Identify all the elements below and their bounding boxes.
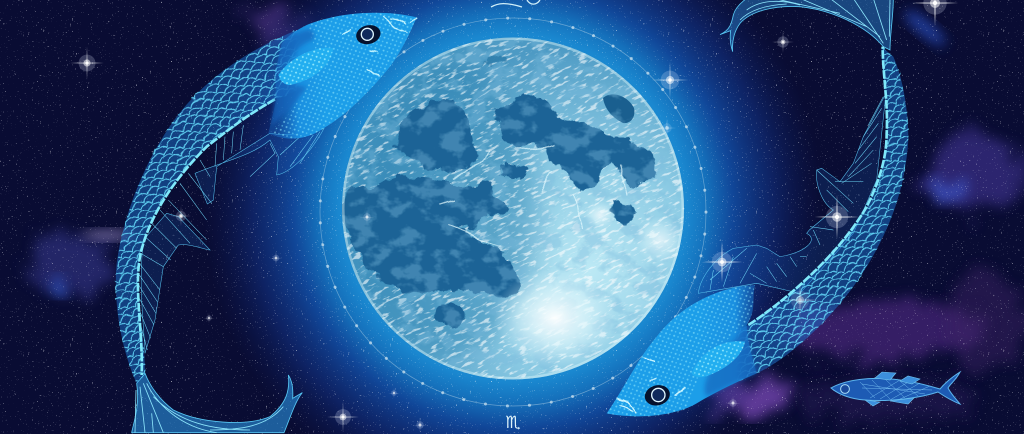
left fish spine xyxy=(138,99,275,375)
small fish eye xyxy=(841,385,849,393)
moon base disc xyxy=(342,38,684,380)
left fish tail xyxy=(132,373,302,433)
fish: upper left xyxy=(116,13,417,433)
right fish head speckle xyxy=(607,285,755,417)
right fish tail xyxy=(720,0,893,52)
left fish mouth markings xyxy=(342,15,417,77)
right fish pectoral speckle xyxy=(692,341,745,377)
left fish head speckle xyxy=(268,13,417,139)
left fish dark shoulder xyxy=(272,30,314,127)
fish: lower right xyxy=(607,0,908,417)
moon surface texture and maria xyxy=(287,0,739,431)
small fish scales xyxy=(860,379,932,400)
left fish pectoral speckle xyxy=(278,48,333,85)
bright limb south-east xyxy=(638,220,681,260)
right fish scale mesh xyxy=(727,47,908,383)
right fish pectoral fin xyxy=(692,341,745,377)
right fish eye xyxy=(643,382,672,408)
right fish scaled body xyxy=(727,47,908,383)
right fish mouth markings xyxy=(617,358,685,413)
zodiac ring xyxy=(320,18,706,406)
zodiac glyph: top xyxy=(491,0,540,7)
right fish fins xyxy=(698,93,886,293)
left fish solid head xyxy=(268,13,417,139)
left fish eye xyxy=(354,22,383,47)
right fish fin rays xyxy=(710,97,883,290)
left fish scaled body xyxy=(116,24,313,383)
left hemisphere shading xyxy=(345,60,535,360)
left fish fin rays xyxy=(138,125,320,350)
small fish body xyxy=(831,372,960,404)
zodiac glyph: bottom: ♏︎ xyxy=(505,413,521,433)
left fish scale mesh xyxy=(116,24,313,383)
rim highlight xyxy=(343,38,683,378)
left fish fins xyxy=(141,128,324,353)
right fish solid head xyxy=(607,285,757,416)
lit rays xyxy=(440,145,625,245)
bright south highland xyxy=(496,274,611,364)
right fish spine xyxy=(748,47,887,325)
small fish xyxy=(831,372,960,406)
moon xyxy=(287,0,739,431)
right fish dark shoulder xyxy=(705,325,757,397)
white surface streaks xyxy=(342,38,684,380)
maria xyxy=(343,56,655,329)
crater, upper right xyxy=(603,94,634,123)
left fish pectoral fin xyxy=(278,48,333,85)
small fish fins xyxy=(865,372,920,406)
mottled mid tones xyxy=(342,37,684,380)
